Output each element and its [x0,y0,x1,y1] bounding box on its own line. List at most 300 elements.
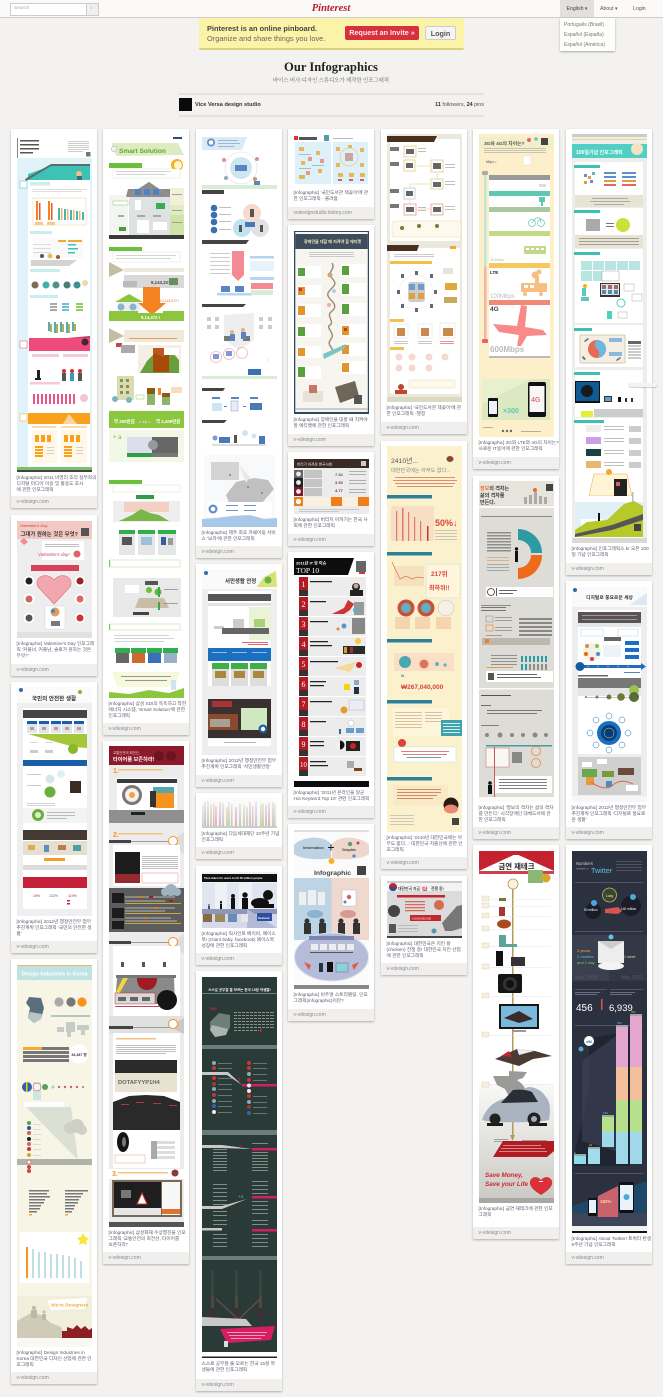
thumbnail: about twitter: 140 million [620,907,636,911]
source: v-vdesign.com [108,726,141,732]
about link: About ▾ [600,6,618,12]
caption: 픽 '커플녀, 커플남, 솔로가 원하는 것은 [16,647,91,652]
source [288,206,374,219]
language tab [560,0,594,17]
caption [478,440,558,452]
page subtitle: 바이스 버사 디자인 스튜디오가 제작한 인포그래픽 [273,78,389,84]
caption [108,701,186,718]
caption: 북! (Giant baby, facebook) 페이스북 [202,937,274,942]
caption [386,835,463,852]
thumbnail: digital media survey [17,138,92,472]
pin: library shelf light [288,129,374,219]
caption: [Infographic] '국민도서관 책꽂이'에 관 [294,190,368,195]
caption: 그래픽(infographic)이란? [294,998,344,1003]
source: v-vdesign.com [294,536,326,542]
login link: Login [633,6,646,12]
language dropdown: Português (Brasil) [564,22,604,28]
thumbnail: smart solution: 14,144,972 t [160,299,178,303]
thumbnail: IT top 10: 10 [300,761,307,769]
source: v-vdesign.com [386,966,419,972]
thumbnail: visual storytelling: Infographic [314,870,351,877]
source: v-vdesign.com [16,1374,49,1380]
thumbnail: IT top 10: 1 [301,580,305,589]
source [381,856,467,869]
thumbnail: library process [387,134,462,402]
thumbnail: about twitter: 2 months [576,954,593,959]
thumbnail: tire safety [109,746,184,1227]
pin: information gap [473,476,559,839]
thumbnail: smart solution: + a [112,435,122,441]
thumbnail: safe life: 19% [32,894,40,898]
pin: public livelihood [196,564,282,787]
thumbnail: smart solution [109,137,184,698]
thumbnail: about twitter: 456 [576,1003,593,1014]
thumbnail: 3G LTE 4G: 4G [490,306,498,313]
thumbnail: smart solution: × 12 = [138,419,151,424]
source: v-vdesign.com [202,1382,234,1388]
thumbnail: digital rich life: 디지털로 풍요로운 세상 [586,594,633,601]
thumbnail: visual storytelling: Graphic [342,848,356,852]
source: v-vdesign.com [108,1254,141,1260]
banner text: Organize and share things you love. [207,34,325,42]
source: v-vdesign.com [202,956,234,962]
source [11,1372,97,1384]
caption: 추진계획 인포그래픽 '서민생활안정' [202,764,271,769]
source: v-vdesign.com [572,830,604,836]
caption: 포그래픽 [386,847,404,852]
source [288,1008,374,1021]
thumbnail: digital rich life [572,587,646,802]
caption: 성장에 관한 인포그래픽 [202,943,247,948]
thumbnail: 3G LTE 4G: ×300 [502,408,518,415]
thumbnail: public livelihood: 서민생활 안정 [224,577,256,585]
caption [294,790,369,801]
thumbnail: about twitter: 130 [602,1111,608,1115]
request invite button [345,26,419,40]
source: v-vdesign.com [16,498,49,504]
source [11,664,97,676]
caption: 디지털 미디어 이용 및 활용도 조사 [16,481,83,486]
thumbnail: society: 4.77 [334,488,343,493]
thumbnail: year 2410: 2410년... [390,456,418,465]
source [566,1252,652,1264]
studio name: Vice Versa design studio [195,102,261,108]
thumbnail: about twitter [572,851,646,1233]
thumbnail: IT top 10: 6 [301,680,305,689]
thumbnail: visual storytelling: Information [302,846,324,850]
pin: tire safety [103,741,189,1264]
pin: safe life [11,682,97,953]
caption: 한 인포그래픽 [478,817,506,822]
thumbnail: society: 3.59 [334,480,343,485]
caption [294,417,368,428]
thumbnail: design industries: Design Industries in Korea [21,972,87,978]
thumbnail: year 2410: ₩267,040,000 [400,684,443,691]
pin: visual storytelling [288,824,374,1021]
caption: [Infographic] 삼성 SDI의 똑똑하고 착한 [108,701,186,706]
pin: library shelf [381,129,467,434]
thumbnail: giant baby [202,872,277,928]
caption: [Infographic] 2012년 행정안전부 업무 [572,805,646,810]
search box [10,3,99,16]
search box: ⌕ [90,6,93,11]
caption: [Infographic] 2011 비영리 조직 실무자의 [16,475,96,480]
thumbnail: society [294,459,369,514]
thumbnail: chicken war: 닭 [422,886,428,894]
thumbnail: about twitter: 21 [588,1143,592,1147]
caption: [Infographic] 다음세대재단 10주년 기념 [202,831,280,836]
thumbnail: valentine's day [17,521,92,638]
thumbnail: safe life: 119% [68,894,76,898]
thumbnail: library [294,135,368,184]
caption: 할 에티켓에 관한 인포그래픽 [294,423,349,428]
thumbnail: valentine's day: Valentine's day! [38,552,70,557]
source: v-vdesign.com [294,808,326,814]
caption: [Infographic] 비주얼 스토리텔링, 인포 [294,992,368,997]
caption [294,190,368,201]
source [196,846,282,859]
caption [572,1236,652,1248]
thumbnail: about twitter: 50 million [584,908,597,912]
caption: 추진계획 인포그래픽 '국민의 안전한 생 [16,925,92,930]
thumbnail: quit smoking: Save Money, [484,1172,523,1179]
language dropdown: Español (España) [564,32,604,38]
thumbnail: safe life: 국민의 안전한 생활 [31,694,76,702]
caption: [Infographic] 금연 재테크에 관한 인포 [478,1206,553,1211]
thumbnail: year 2410: 50%↓ [434,518,457,528]
caption: [Infographic] Valentine's Day 인포그래 [16,641,94,646]
caption: 인포그래픽 [108,713,130,718]
caption: [Infographic] 제주 최초 카쉐어링 서비 [202,530,276,535]
caption: 스스로 공부할 줄 모르는 한국 15살 학 [202,1361,275,1366]
pin: etiquette for the disabled [288,225,374,446]
thumbnail: tire safety: DOTAFYYP1H4 [118,1080,160,1086]
thumbnail: 3G LTE 4G: Mbps = [486,160,496,164]
login button: Login [431,28,450,38]
thumbnail: about twitter: 1day [605,894,613,898]
thumbnail: 100 days: 100일기념 인포그래픽 [576,149,622,156]
caption: 그래픽 '교통안전의 최전선, 타이어를 [108,1236,179,1241]
caption [16,641,94,658]
caption: [Infographic] 3G와 LTE와 4G의 차이는? [478,440,559,445]
thumbnail: chicken war: 5,000,000,000 [412,916,431,920]
thumbnail: smart solution: Smart Solution [118,148,165,155]
source [473,1226,559,1239]
caption [294,517,368,528]
thumbnail: about twitter: 182% [600,1199,611,1204]
caption: [Infographic] 버리지 아까기는 한국 사 [294,517,368,522]
thumbnail: tire safety: 타이어를 보존하라! [112,755,154,763]
source [288,806,374,818]
language dropdown [560,18,615,51]
thumbnail: IT top 10: 5 [301,660,305,669]
caption [202,831,280,842]
thumbnail: etiquette: 장애인을 대할 때 지켜야 할 에티켓 [304,238,361,244]
source: v-vdesign.com [386,860,419,866]
pin: 3G LTE 4G [473,129,559,469]
caption: 그래픽 [478,1212,491,1217]
request invite button: Request an Invite » [349,28,415,36]
caption [202,530,276,541]
thumbnail: tire safety: 1. [112,768,118,775]
thumbnail: korean students: -1 [238,1144,242,1149]
pin: chicken war [381,876,467,975]
source: v-vdesign.com [478,460,511,466]
pinterest logo: Pinterest [312,3,350,14]
pin: digital rich life [566,581,652,839]
thumbnail: smart solution: 9,143,227 t [150,280,173,285]
caption: 무도 없다...' 대한민국 저출산에 관한 인 [386,841,463,846]
source: v-vdesign.com [202,548,234,554]
source: v-vdesign.com [202,778,234,784]
thumbnail: society: 버리기 아까운 한국사회 [296,462,332,466]
pin: 100 days [566,129,652,575]
header bar [0,0,663,18]
thumbnail: quit smoking [478,851,554,1203]
source: v-vdesign.com [294,436,326,442]
caption: 활' [16,931,22,936]
source: v-vdesign.com [478,830,511,836]
source: v-vdesign.com [16,666,49,672]
source [381,962,467,975]
thumbnail: about twitter: 350 [616,1021,622,1025]
thumbnail: about twitter: Twitter [590,866,612,875]
thumbnail: IT top 10 [294,558,369,787]
thumbnail: car sharing [202,137,277,527]
caption [202,758,276,769]
thumbnail: chicken war: 전쟁 중! [430,886,443,891]
thumbnail: 100 days [572,134,646,543]
thumbnail: colour stripes [202,801,277,828]
thumbnail: smart solution: 약 2,400만원 [156,418,180,425]
banner text: Pinterest is an online pinboard. [207,24,317,32]
source [11,940,97,953]
thumbnail: IT top 10: 3 [301,620,305,629]
pin: digital media survey [11,129,97,508]
caption: 생들에 관한 인포그래픽 [202,1367,247,1372]
thumbnail: information gap [478,481,554,802]
caption [16,919,92,936]
source [196,952,282,965]
caption: 회에 관한 인포그래픽 [294,523,335,528]
caption: 에 관한 인포그래픽 [16,487,54,492]
thumbnail: year 2410: ₩ [400,674,404,678]
source [288,534,374,546]
source [566,562,652,575]
caption: [Infographic] 삼성화재 수상행진을 인포 [108,1230,186,1235]
thumbnail: korean students: +4 [238,1194,243,1199]
thumbnail: safe life [17,688,92,916]
thumbnail: 3G LTE 4G: 3G와 4G의 차이는? [484,140,524,147]
thumbnail: korean students: -2 [236,1077,240,1082]
caption [386,941,461,958]
thumbnail: korean students: 스스로 공부할 줄 모르는 한국 15살 학생들! [208,987,270,992]
page title: Our Infographics [284,60,378,74]
caption: 5주년 기념 인포그래픽 [572,1242,616,1247]
pin: year 2410 [381,441,467,869]
thumbnail: tire safety: 2. [112,832,118,839]
thumbnail: information gap: 만든다. [480,499,495,506]
thumbnail: 3G LTE 4G: LTE [490,270,498,275]
thumbnail: tire safety: 교통안전의 최전선, [112,750,139,755]
source [566,826,652,839]
follower counts: 11 followers, 24 pins [435,102,484,108]
caption: [Infographic] '정보의 격차는 삶의 격차 [478,805,554,810]
thumbnail: year 2410: 217위 [430,569,447,578]
thumbnail: giant baby: Time taken for users to hit 50 million people [204,876,262,880]
caption: [Infographic] Design Industries in [16,1350,85,1355]
thumbnail: chicken war: 대한민국 지금 [398,886,420,891]
caption: [Infographic] 장애인을 대할 때 지켜야 [294,417,368,422]
thumbnail: giant baby: facebook [258,916,269,920]
thumbnail: valentine's day: 그대가 원하는 것은 무엇? [20,530,77,538]
caption: Hot Keyword Top 10' 관련 인포그래픽 [294,796,369,801]
thumbnail: IT top 10: 7 [301,700,305,709]
caption [16,1350,92,1367]
caption: [Infographic] 2012년 행정안전부 업무 [16,919,91,924]
thumbnail: 3G LTE 4G: 600Mbps [490,345,524,354]
thumbnail: about twitter: 450 [630,1010,636,1014]
thumbnail: smart solution: 약 200만원 [114,418,134,425]
thumbnail: information gap: 삶의 격차를 [480,492,504,499]
caption: [Infographic] 인포그래픽스.kr 오픈 100 [572,546,649,551]
invite banner [199,18,464,50]
pin: IT top 10 [288,552,374,818]
thumbnail: about twitter: related to [576,866,588,870]
thumbnail: quit smoking: 금연 재테크 [498,862,534,871]
floating scroll handle [629,383,657,387]
thumbnail: tire safety: 3. [112,1171,117,1178]
thumbnail: quit smoking: Save your Life [484,1181,528,1188]
thumbnail: smart solution: 9,14,472 t [140,315,160,320]
source [11,496,97,508]
source [381,422,467,434]
source [103,722,189,735]
caption: 한 인포그래픽 - 올려봄 [294,196,338,201]
thumbnail: about twitter: 1 week [624,955,635,959]
caption: 에너지 시스템, 'Smart Solution'에 관한 [108,707,185,712]
thumbnail: year 2410: 대한민국에는 아무도 없다.. [390,466,449,474]
pin: smart solution [103,129,189,735]
caption: 사로운 IT용어에 관한 인포그래픽 [478,446,543,451]
caption [572,546,652,558]
caption [386,405,461,416]
pin: design industries [11,959,97,1384]
thumbnail: visual storytelling [294,830,369,989]
thumbnail: design industries: 34,387 명 [71,1052,86,1057]
caption: [Infographic] '2410년 대한민국에는 아 [386,835,462,840]
language dropdown: Español (América) [564,42,605,48]
board info bar [179,93,484,117]
source [196,774,282,787]
caption: [Infographic] About Twitter! 트위터 탄생 [572,1236,651,1241]
login button [425,26,456,40]
pin: korean society [288,452,374,546]
thumbnail: design industries [17,965,92,1347]
caption: 일 기념 인포그래픽 [572,552,609,557]
thumbnail: IT top 10: 4 [301,640,305,649]
thumbnail: information gap: 정보의 격차는 [480,485,509,492]
caption: 스 '보카'에 관한 인포그래픽 [202,536,255,541]
thumbnail: 3G LTE 4G [478,134,554,437]
source [473,456,559,469]
caption: 보존하라!' [108,1242,128,1247]
pin: quit smoking [473,845,559,1239]
thumbnail: IT top 10: TOP 10 [296,566,319,575]
caption: [Infographic] 픽사인트 베이비, 페이스 [202,931,276,936]
thumbnail: safe life: 132% [48,894,57,898]
thumbnail: about twitter: and 1 day [576,960,594,965]
thumbnail: about twitter: x50 [586,1040,592,1044]
banner text [207,24,325,42]
thumbnail: about twitter: Mar, 2006 [574,975,597,981]
caption: Korea 대한민국 디자인 산업에 관한 인 [16,1356,92,1361]
thumbnail: valentine's day: Valentine's Day [20,523,48,528]
source [288,434,374,446]
pin: about twitter [566,845,652,1264]
caption: 인포그래픽 [202,837,223,842]
thumbnail: public livelihood [202,571,277,755]
thumbnail: year 2410: 최하위!! [428,584,449,592]
thumbnail: about twitter: Numbers [576,861,592,866]
caption: (chicken) 전쟁 중! 대한민국 치킨 산업 [386,947,461,952]
thumbnail: chicken war [387,881,462,938]
caption: [Infographic] 2012년 행정안전부 업무 [202,758,276,763]
thumbnail: IT top 10: 9 [301,740,305,749]
thumbnail: 3G LTE 4G: 100Mbps [490,294,514,300]
source [103,1252,189,1264]
thumbnail: society: 7.34 [334,472,343,477]
caption: 추진계획 인포그래픽 '디지털로 풍요로 [572,811,645,816]
thumbnail: korean students: 95% [210,1007,216,1011]
source: v-vdesign.com [16,944,49,950]
thumbnail: design industries: We're Designers [50,1302,88,1308]
thumbnail: IT top 10: 2011년 IT 핫 이슈 [296,560,326,566]
source [473,826,559,839]
avatar [179,98,192,111]
caption: 를 만든다.' 시각장애인 대체도서에 관 [478,811,551,816]
pin: car sharing [196,129,282,558]
caption [16,475,96,492]
pin: 10th anniversary [196,793,282,859]
caption: [Infographic] '국민도서관 책꽂이'에 관 [386,405,461,410]
thumbnail: IT top 10: 2 [301,600,305,609]
caption: 에 관한 인포그래픽 [386,953,424,958]
thumbnail: about twitter: Mar, 2011 [620,975,643,981]
search box: Search [14,6,29,11]
source [196,1378,282,1391]
pin: korean students [196,971,282,1391]
caption: [Infographic] 대한민국은 치킨 왕 [386,941,451,946]
source: v-vdesign.com [294,1012,326,1018]
thumbnail: about twitter: 3 years, [576,948,591,953]
caption [202,1361,275,1372]
thumbnail: year 2410 [387,446,462,832]
source: v-vdesign.com [572,1254,604,1260]
thumbnail: 3G LTE 4G: 40Mbps [490,257,504,262]
thumbnail: about twitter: 8 [574,1151,576,1155]
pin: valentine's day [11,515,97,676]
source: v-vdesign.com [572,566,604,572]
source: v-vdesign.com [202,850,234,856]
caption: [Infographic] '2011년 온라인을 달군 [294,790,364,795]
caption [108,1230,186,1247]
caption: 운 생활' [572,817,587,822]
caption: 무엇?' [16,653,29,658]
thumbnail: 3G LTE 4G: 4G [530,397,540,404]
source: vvdesignstudio.tistory.com [294,210,352,216]
caption [202,931,276,948]
